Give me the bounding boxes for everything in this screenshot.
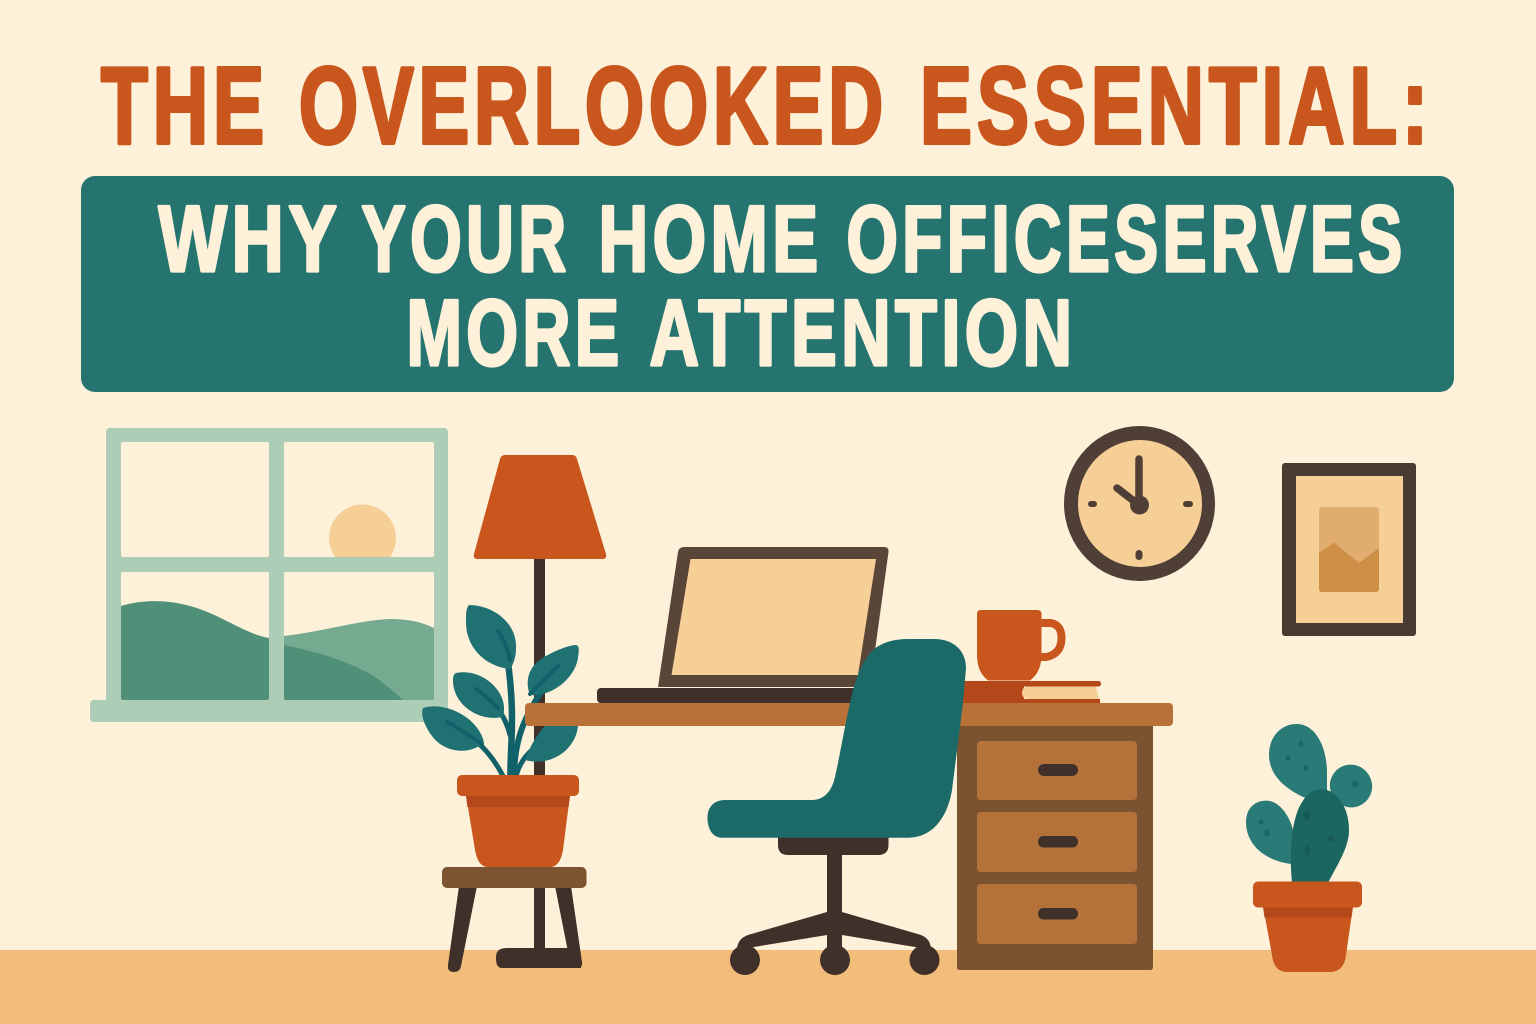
plant leaves bbox=[422, 605, 579, 762]
laptop bbox=[597, 547, 889, 703]
cactus main stem bbox=[1291, 789, 1349, 883]
chair seat and back bbox=[708, 639, 966, 838]
desk drawers cabinet bbox=[957, 726, 1153, 970]
coffee mug bbox=[977, 610, 1062, 680]
potted plant bbox=[422, 605, 579, 776]
office chair bbox=[708, 639, 966, 975]
books bbox=[960, 681, 1101, 703]
plant stems bbox=[447, 656, 558, 776]
title bbox=[101, 45, 1433, 167]
title: OVERLOOKED bbox=[299, 45, 888, 167]
window bbox=[90, 428, 448, 722]
banner heading text: HOME bbox=[598, 186, 822, 291]
top drawer bbox=[977, 741, 1137, 800]
bottom drawer bbox=[977, 884, 1137, 944]
title: THE bbox=[101, 45, 269, 167]
hills bbox=[121, 601, 269, 700]
cactus pot bbox=[1253, 882, 1362, 972]
banner heading text: MORE bbox=[406, 280, 624, 385]
desk top bbox=[525, 703, 1173, 726]
banner heading text: WHY bbox=[158, 186, 342, 291]
middle drawer bbox=[977, 812, 1137, 872]
banner heading text: YOUR bbox=[362, 186, 570, 291]
cactus pads bbox=[1246, 724, 1380, 864]
floor lamp bbox=[474, 455, 606, 968]
banner heading text bbox=[158, 186, 1406, 385]
chair base bbox=[730, 836, 940, 975]
plant pot bbox=[457, 775, 579, 867]
clock bbox=[1064, 426, 1215, 581]
cactus plant bbox=[1246, 724, 1380, 972]
stool bbox=[442, 867, 586, 972]
banner heading text: ATTENTION bbox=[650, 280, 1076, 385]
sun bbox=[329, 504, 396, 557]
framed picture bbox=[1282, 463, 1416, 636]
floor bbox=[0, 950, 1536, 1024]
leaf veins bbox=[447, 631, 558, 744]
banner bbox=[81, 176, 1454, 392]
